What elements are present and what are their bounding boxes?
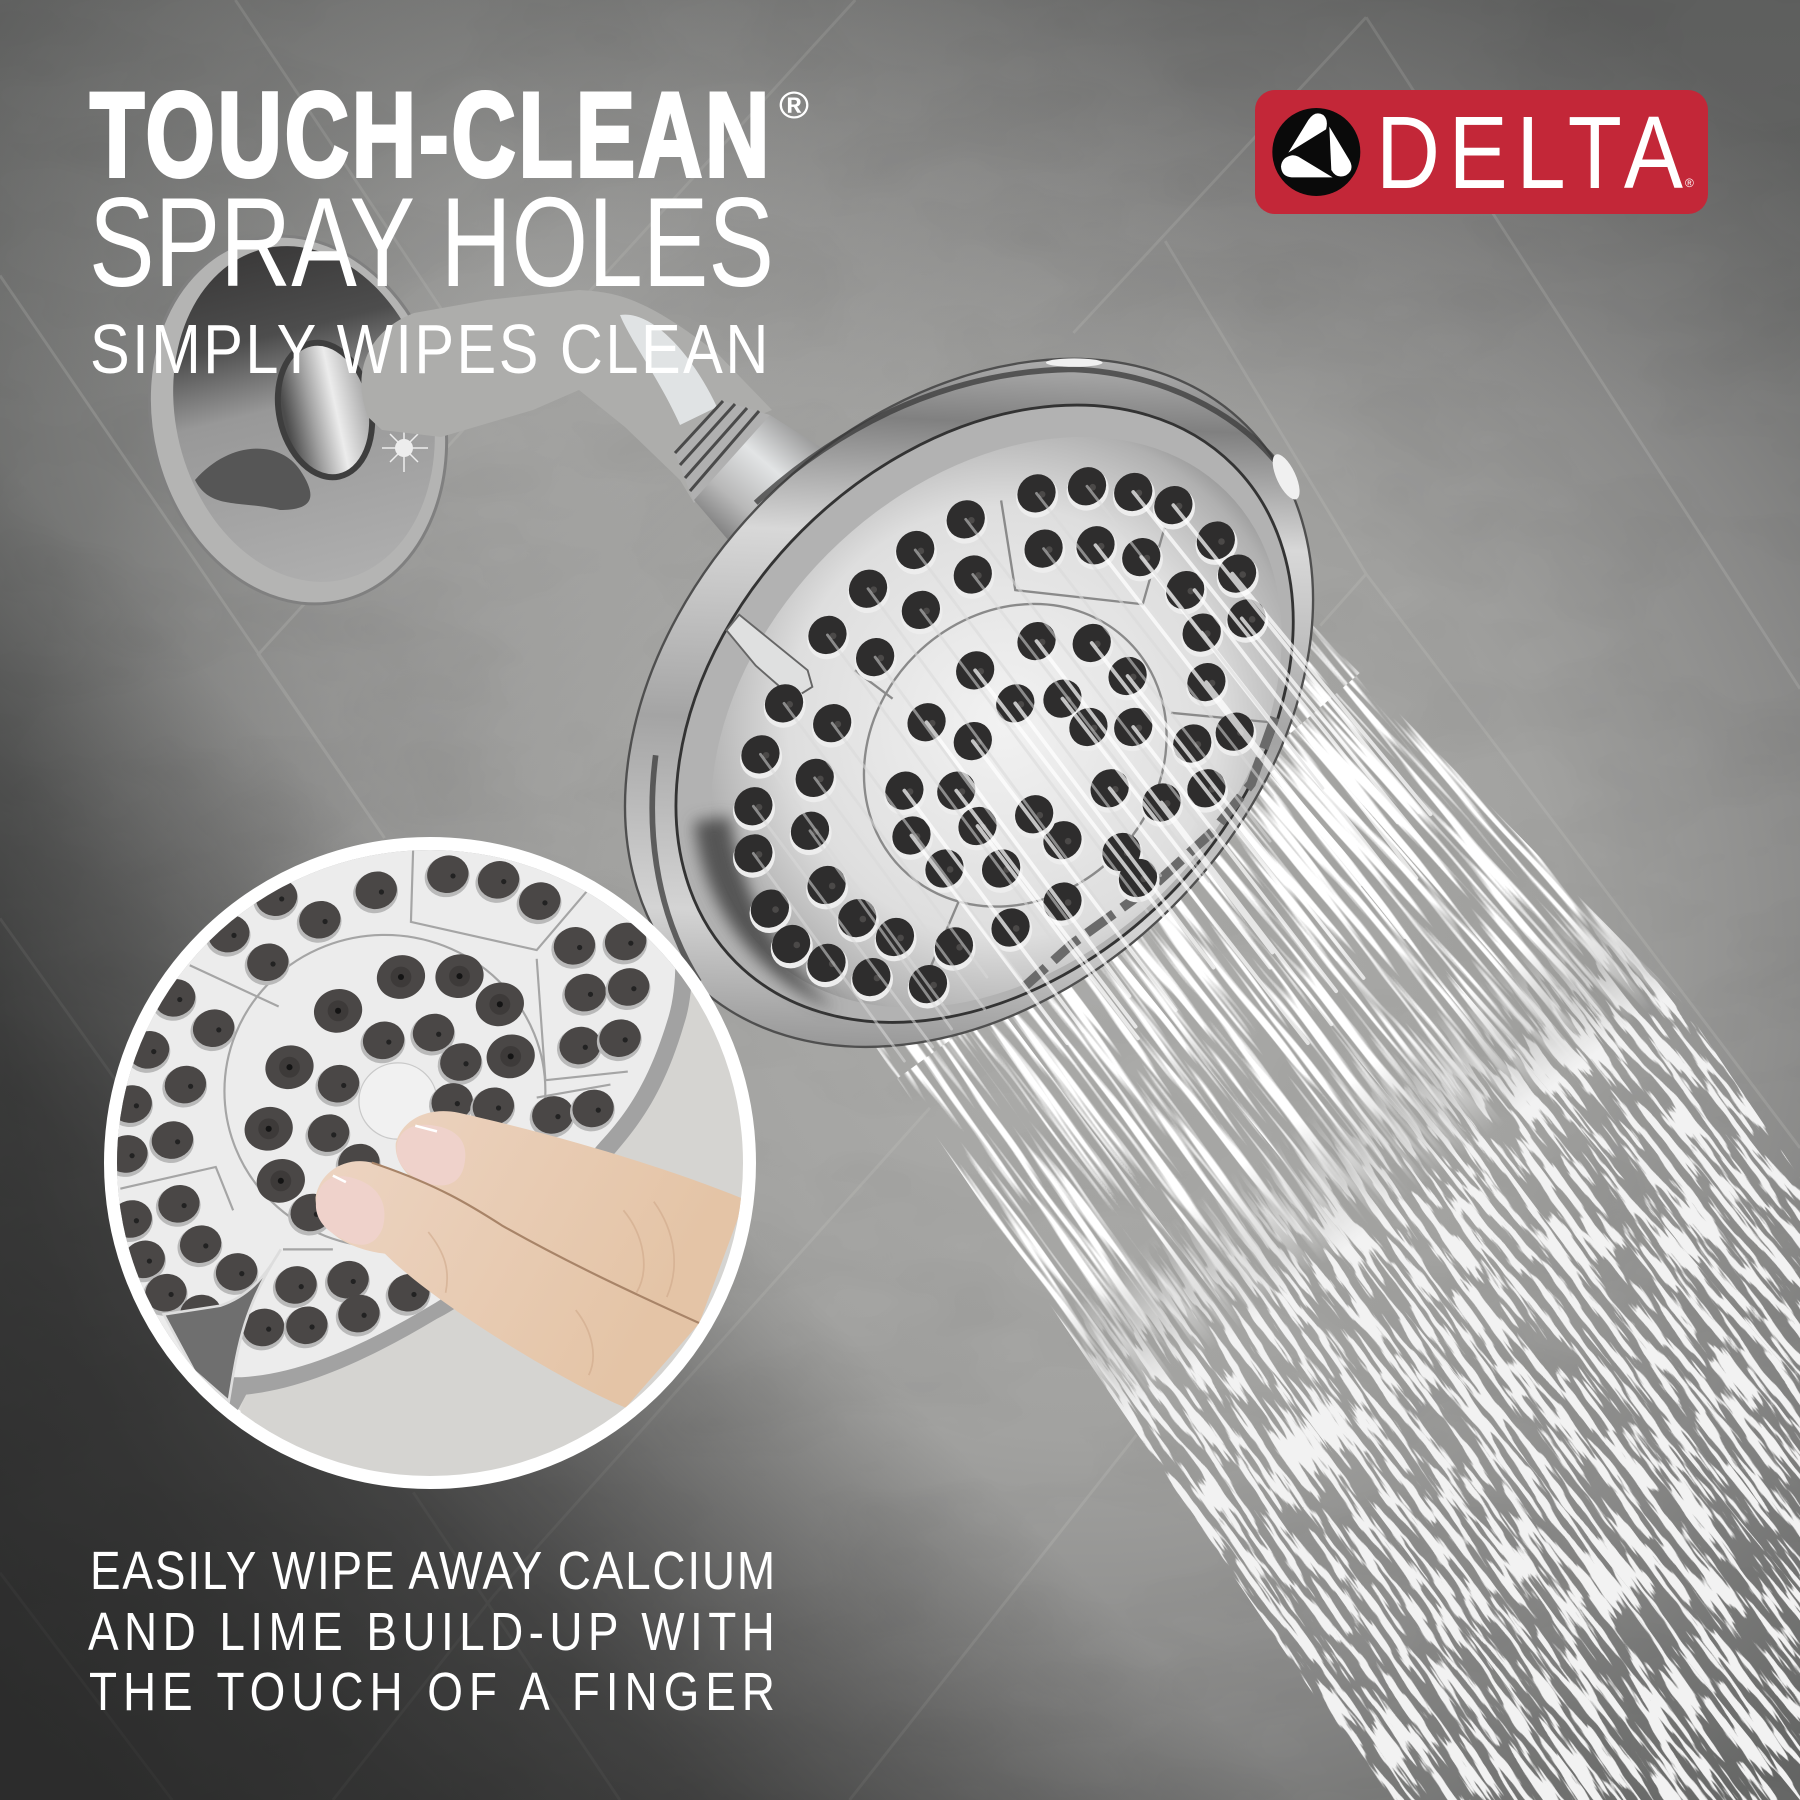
bevel lower-left shadow xyxy=(694,817,836,1010)
caption line 2: AND LIME BUILD-UP WITH xyxy=(88,1602,775,1662)
inset selector lever xyxy=(164,1249,281,1401)
far spray: broken droplet dashes xyxy=(1064,912,1800,1800)
head inner bevel xyxy=(553,282,1416,1145)
inset centre button xyxy=(359,1063,437,1139)
selector lever xyxy=(726,615,812,699)
caption line 3: THE TOUCH OF A FINGER xyxy=(89,1662,775,1722)
logo mark xyxy=(1272,108,1360,196)
inset white ring xyxy=(111,844,749,1482)
near spray: long thin jets xyxy=(876,626,1664,1402)
Delta logo badge xyxy=(1255,90,1708,214)
caption line 1: EASILY WIPE AWAY CALCIUM xyxy=(90,1541,775,1601)
chrome segment edges xyxy=(1025,718,1275,987)
inset head rim xyxy=(117,850,691,1410)
rim highlights xyxy=(1046,358,1305,503)
inset head face xyxy=(118,850,676,1378)
rim dark reflections xyxy=(652,369,1275,982)
face channels xyxy=(802,500,1270,969)
inset panel seams xyxy=(120,850,628,1249)
logo wordmark: DELTA xyxy=(1376,96,1683,211)
inset holes xyxy=(99,851,655,1355)
fingers xyxy=(316,1111,745,1408)
inset: finger wiping spray holes xyxy=(104,837,756,1489)
caption: easily wipe away calcium and lime build-up with the touch of a finger xyxy=(88,1541,775,1722)
title: Touch-Clean: TOUCH-CLEAN xyxy=(90,68,769,202)
tagline: simply wipes clean: SIMPLY WIPES CLEAN xyxy=(90,309,768,388)
water jets over the face xyxy=(753,486,1431,1061)
subtitle: spray holes: SPRAY HOLES xyxy=(89,171,774,313)
shower arm xyxy=(361,290,825,548)
wall plate escutcheon xyxy=(111,204,485,636)
registered mark: ® xyxy=(779,85,809,127)
spray holes xyxy=(724,459,1277,1017)
inset tile xyxy=(240,969,743,1476)
spray plume: water streaks xyxy=(876,626,1800,1800)
inset magnified photo xyxy=(117,850,743,1476)
spray face xyxy=(598,323,1395,1121)
chrome outer rim xyxy=(488,222,1450,1184)
logo registered mark: ® xyxy=(1685,176,1694,190)
shower head xyxy=(488,222,1450,1184)
